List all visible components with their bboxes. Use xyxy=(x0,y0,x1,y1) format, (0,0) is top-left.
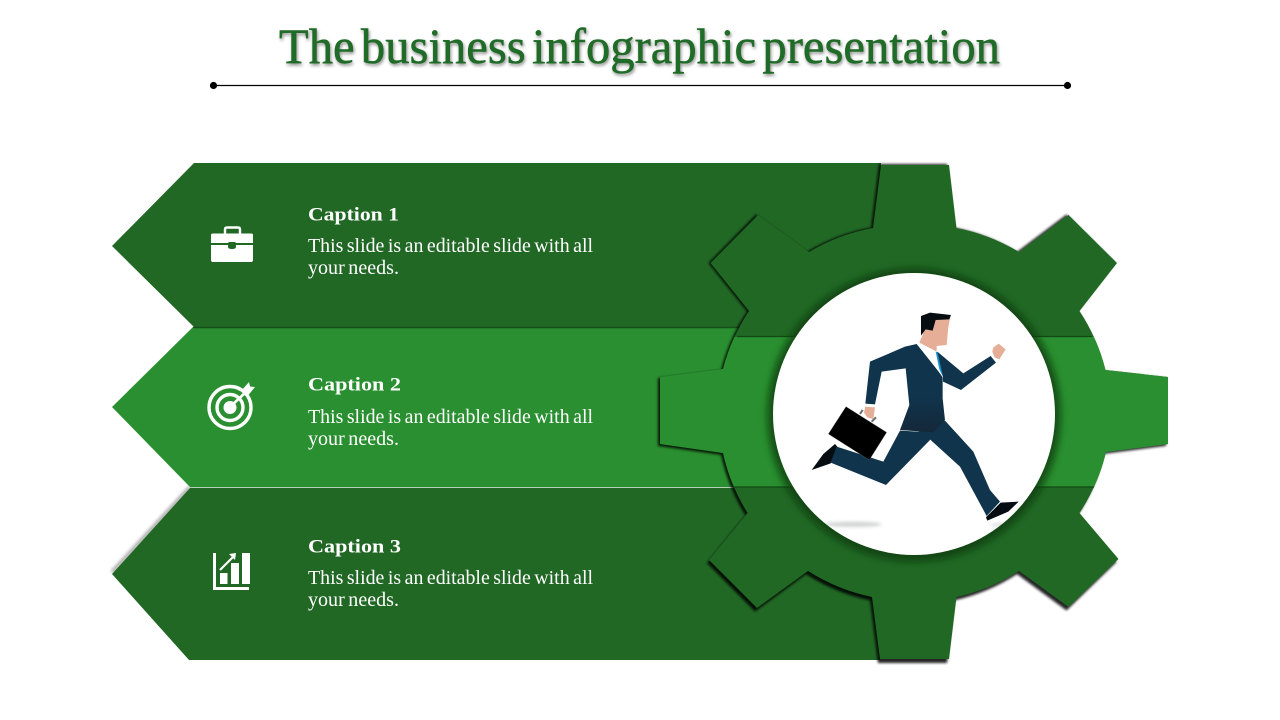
briefcase handle xyxy=(860,410,876,422)
front hand xyxy=(992,344,1006,359)
text: caption 2: This slide is an editable slide with all xyxy=(308,406,593,428)
hole xyxy=(773,273,1055,555)
text: caption 1 xyxy=(308,204,593,279)
text: caption 2 xyxy=(308,374,593,450)
text: caption 1: This slide is an editable slide with all xyxy=(308,235,593,257)
text: caption 2: your needs. xyxy=(308,428,399,450)
title divider line xyxy=(210,82,1071,89)
panel: arrow 3 xyxy=(112,487,880,660)
tie xyxy=(936,352,943,377)
back hand xyxy=(864,407,875,419)
back arm xyxy=(865,346,906,404)
gear shadow xyxy=(658,164,1166,663)
rear shoe xyxy=(812,444,837,470)
briefcase xyxy=(828,407,887,460)
front shoe xyxy=(986,502,1019,521)
rear leg xyxy=(831,431,931,485)
front arm xyxy=(937,352,996,390)
shirt xyxy=(938,370,943,378)
text: caption 3: your needs. xyxy=(308,589,399,611)
gear band edges xyxy=(734,336,1094,487)
text: caption 1: Caption 1 xyxy=(308,204,399,226)
text: caption 2: Caption 2 xyxy=(308,374,401,396)
panel: arrow 1 xyxy=(112,163,881,327)
gear middle band xyxy=(660,337,1168,487)
icon: briefcase xyxy=(211,228,253,262)
icon: bar chart xyxy=(213,553,250,590)
neck and face xyxy=(919,318,950,352)
text: caption 3: This slide is an editable slide with all xyxy=(308,567,593,589)
panel: arrow 2 xyxy=(112,327,800,488)
icon: target xyxy=(209,382,255,428)
gear body dark xyxy=(660,165,1168,659)
hair xyxy=(921,313,951,336)
gear xyxy=(658,164,1168,663)
ground shadows xyxy=(825,522,1020,527)
title: The business infographic presentation xyxy=(279,18,1000,74)
illustration: running businessman xyxy=(812,313,1020,527)
text: caption 3: Caption 3 xyxy=(308,536,401,558)
front leg xyxy=(917,421,1000,516)
torso xyxy=(900,344,945,432)
text: caption 3 xyxy=(308,536,593,611)
hole shadow xyxy=(767,268,1061,562)
text: caption 1: your needs. xyxy=(308,257,399,279)
